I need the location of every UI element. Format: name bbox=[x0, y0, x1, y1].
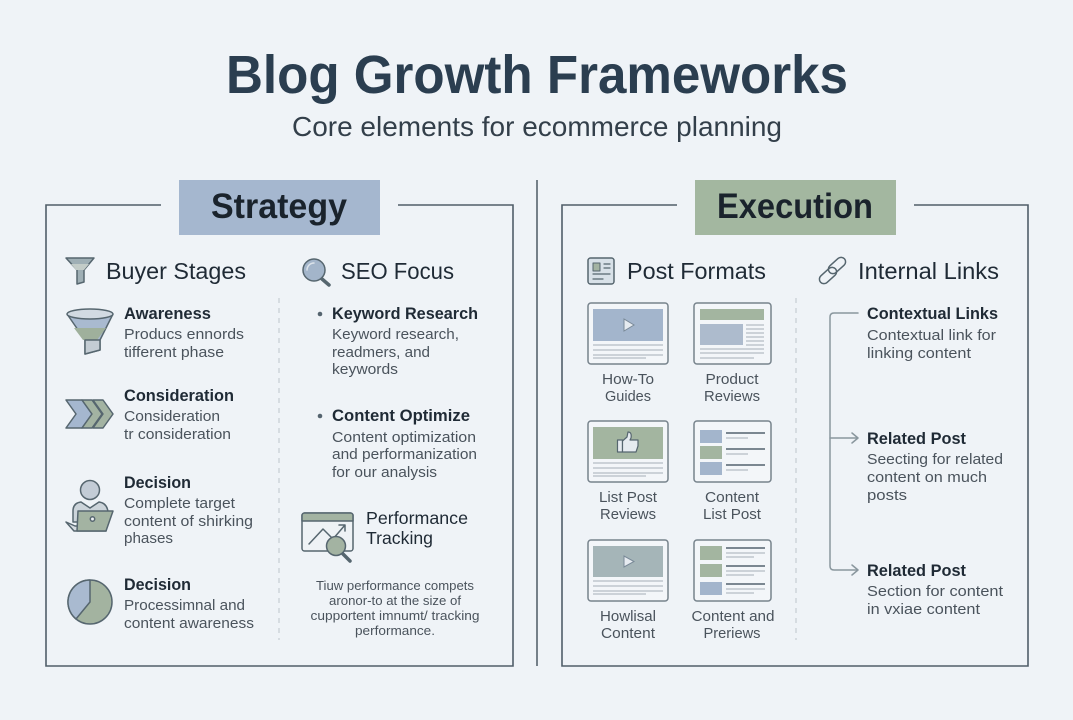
card: how-to guides: How-To bbox=[602, 371, 654, 388]
card: content list post bbox=[694, 421, 771, 523]
item: consideration bbox=[66, 387, 234, 443]
item: related post one: content on much bbox=[867, 469, 987, 486]
item: consideration: Consideration bbox=[124, 408, 220, 425]
item: decision two: Processimnal and bbox=[124, 597, 245, 614]
icon: funnel bbox=[67, 309, 113, 354]
heading: strategy bbox=[179, 180, 380, 235]
item: related post one: Related Post bbox=[867, 430, 966, 448]
item: related post two: Section for content bbox=[867, 583, 1004, 600]
icon: chevrons bbox=[66, 400, 113, 428]
heading: internal links: Internal Links bbox=[858, 258, 999, 284]
card: product reviews bbox=[694, 303, 771, 405]
item: awareness: Awareness bbox=[124, 305, 211, 323]
center divider bbox=[536, 180, 538, 666]
card: content and previews: Preriews bbox=[704, 625, 761, 642]
card: list post reviews: List Post bbox=[599, 489, 658, 506]
card: content and previews: Content and bbox=[692, 608, 774, 625]
icon: browser chart with magnifier bbox=[302, 513, 353, 561]
icon: pie chart bbox=[68, 580, 112, 624]
item: consideration: Consideration bbox=[124, 387, 234, 405]
icon: newspaper bbox=[588, 258, 614, 284]
heading: post formats: Post Formats bbox=[627, 258, 766, 284]
item: related post one: Seecting for related bbox=[867, 451, 1003, 468]
item: content optimize bbox=[318, 407, 477, 481]
item: related post one: posts bbox=[867, 487, 907, 504]
icon: chain link bbox=[818, 255, 847, 286]
item: related post one bbox=[867, 430, 1003, 504]
icon: magnifier bbox=[303, 259, 329, 285]
item: awareness: Producs ennords bbox=[124, 326, 244, 343]
item: decision two: Decision bbox=[124, 576, 191, 594]
panel: execution bbox=[562, 180, 1028, 666]
item: decision one: Decision bbox=[124, 474, 191, 492]
heading: execution: Execution bbox=[717, 187, 873, 226]
item: keyword research: Keyword Research bbox=[332, 305, 478, 323]
item: performance tracking: Performance bbox=[366, 508, 468, 528]
item: keyword research: readmers, and bbox=[332, 344, 430, 361]
icon: person with laptop bbox=[66, 480, 113, 531]
item: related post two: Related Post bbox=[867, 562, 966, 580]
heading: strategy: Strategy bbox=[211, 187, 348, 226]
item: contextual links: Contextual Links bbox=[867, 305, 998, 323]
item: decision one: Complete target bbox=[124, 495, 236, 512]
item: decision one: phases bbox=[124, 530, 173, 547]
card: product reviews: Product bbox=[706, 371, 759, 388]
column divider bbox=[278, 298, 280, 640]
item: keyword research: Keyword research, bbox=[332, 326, 459, 343]
heading: buyer stages: Buyer Stages bbox=[106, 258, 246, 284]
card: content list post: List Post bbox=[703, 506, 762, 523]
title: Blog Growth Frameworks bbox=[226, 45, 848, 105]
card: content list post: Content bbox=[705, 489, 760, 506]
icon: thumbs up bbox=[618, 432, 638, 452]
item: contextual links bbox=[867, 305, 998, 362]
item: related post two bbox=[867, 562, 1004, 618]
item: awareness: tifferent phase bbox=[124, 344, 224, 361]
item: performance tracking: cupportent imnumt/ tracking bbox=[310, 608, 480, 623]
card: list post reviews: Reviews bbox=[600, 506, 656, 523]
heading: seo focus: SEO Focus bbox=[341, 258, 454, 284]
item: decision two bbox=[68, 576, 254, 632]
column divider bbox=[795, 298, 797, 640]
panel: strategy bbox=[46, 180, 513, 666]
card: list post reviews bbox=[588, 421, 668, 523]
item: decision one bbox=[66, 474, 253, 547]
card: howlisal content bbox=[588, 540, 668, 642]
card: product reviews: Reviews bbox=[704, 388, 760, 405]
connector tree with arrows bbox=[830, 313, 858, 575]
item: awareness bbox=[67, 305, 244, 361]
item: performance tracking: performance. bbox=[355, 623, 435, 638]
item: consideration: tr consideration bbox=[124, 426, 231, 443]
item: keyword research bbox=[318, 305, 478, 378]
item: content optimize: for our analysis bbox=[332, 464, 437, 481]
subtitle: Core elements for ecommerce planning bbox=[292, 111, 782, 142]
item: keyword research: keywords bbox=[332, 361, 398, 378]
item: performance tracking: aronor-to at the size of bbox=[329, 593, 461, 608]
item: content optimize: and performanization bbox=[332, 446, 477, 463]
card: how-to guides bbox=[588, 303, 668, 405]
item: performance tracking: Tracking bbox=[366, 528, 433, 548]
card: howlisal content: Content bbox=[601, 625, 656, 642]
card: content and previews bbox=[692, 540, 774, 642]
item: contextual links: Contextual link for bbox=[867, 327, 996, 344]
item: contextual links: linking content bbox=[867, 345, 972, 362]
card: how-to guides: Guides bbox=[605, 388, 651, 405]
item: related post two: in vxiae content bbox=[867, 601, 981, 618]
icon: small funnel bbox=[66, 258, 94, 284]
item: decision two: content awareness bbox=[124, 615, 254, 632]
card: howlisal content: Howlisal bbox=[600, 608, 656, 625]
item: performance tracking: Tiuw performance compets bbox=[316, 578, 474, 593]
item: content optimize: Content optimization bbox=[332, 429, 476, 446]
heading: execution bbox=[695, 180, 896, 235]
item: decision one: content of shirking bbox=[124, 513, 253, 530]
item: performance tracking bbox=[302, 508, 480, 638]
item: content optimize: Content Optimize bbox=[332, 407, 470, 425]
